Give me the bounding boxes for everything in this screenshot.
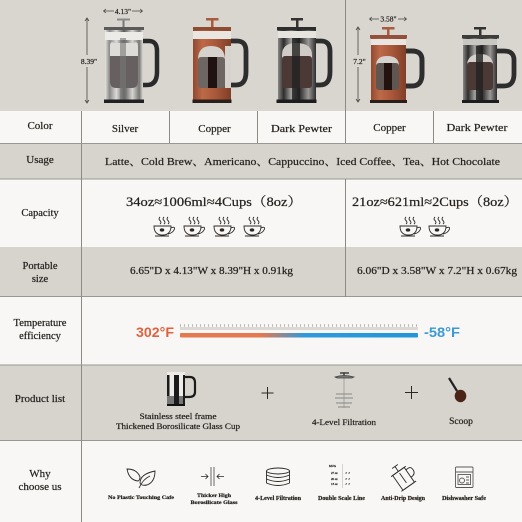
hot temperature: 302°F: [136, 325, 174, 340]
temperature gradient bar: [180, 333, 418, 338]
cell: copper: Copper: [198, 123, 231, 135]
icon: leaves: [127, 469, 155, 488]
row: color: [0, 111, 522, 144]
item caption: scoop: Scoop: [449, 417, 473, 427]
label: color: Color: [27, 120, 53, 132]
icon: anti-drip press: [388, 459, 419, 491]
cell: silver: Silver: [112, 123, 138, 135]
feature: anti-drip design: Anti-Drip Design: [381, 496, 426, 502]
icon: double scale line: ♂ ♂: [345, 471, 350, 475]
dimension: height 8.39 inches: [81, 18, 97, 103]
feature: thicker high borosilicate glass: Thicker High: [197, 493, 231, 499]
icon: dishwasher: [456, 467, 473, 488]
icon: double scale line: [329, 464, 350, 488]
dimension: width 3.58 inches: 3.58": [380, 14, 397, 24]
feature: no plastic touching cafe: No Plastic Touching Cafe: [108, 495, 175, 501]
product: dark pewter large press: [276, 18, 330, 103]
row: product list: [0, 365, 522, 441]
item caption: filter: 4-Level Filtration: [312, 417, 377, 427]
icon: double scale line: 20 oz: [331, 477, 338, 481]
row: portable size: [0, 247, 522, 297]
icon: plus: [405, 386, 418, 399]
capacity small: 21oz≈621ml≈2Cups（8oz）: [352, 194, 518, 209]
label: portable size: size: [32, 274, 48, 285]
feature: dishwasher safe: Dishwasher Safe: [442, 496, 486, 502]
dimension: width 4.13 inches: 4.13": [115, 7, 131, 16]
cell: copper small: Copper: [373, 122, 406, 134]
dimension: width 4.13 inches: [104, 7, 142, 16]
icon: double scale line: 13 oz: [331, 482, 338, 486]
dimension: width 3.58 inches: [370, 14, 406, 24]
product: copper large press: [192, 18, 246, 103]
row: usage: [0, 144, 522, 179]
dimensions large: 6.65"D x 4.13"W x 8.39"H x 0.91kg: [130, 266, 293, 277]
item caption: glass cup: Stainless steel frame: [140, 412, 217, 421]
icons: four coffee cups: [154, 217, 265, 236]
label: why choose us: [18, 468, 62, 493]
icon: filter stack: [266, 468, 290, 486]
item caption: glass cup: Thickened Borosilicate Glass Cup: [116, 422, 240, 431]
icon: double scale line: ♂ ♂: [345, 477, 350, 481]
product: dark pewter small press: [462, 27, 514, 103]
item: glass cup: [167, 372, 195, 406]
icon: double scale line: MUG: [329, 464, 337, 468]
item: scoop: [449, 378, 466, 402]
feature: double scale line: Double Scale Line: [318, 496, 365, 502]
item caption: glass cup: [116, 412, 240, 431]
ruler: [180, 326, 418, 330]
feature: thicker high borosilicate glass: [190, 493, 238, 506]
icon: double scale line: ♂ ♂: [345, 482, 350, 486]
label: why choose us: Why: [29, 468, 51, 480]
label: why choose us: choose us: [18, 481, 62, 493]
cell: dark pewter: Dark Pewter: [271, 123, 332, 135]
cell: dark pewter small: Dark Pewter: [446, 122, 508, 134]
row: temperature efficiency: [0, 297, 522, 365]
item: filter assembly: [335, 372, 354, 408]
icons: two coffee cups: [400, 217, 450, 236]
label: portable size: [22, 261, 58, 285]
capacity large: 34oz≈1006ml≈4Cups（8oz）: [126, 194, 302, 209]
label: temperature efficiency: Temperature: [14, 318, 67, 329]
label: portable size: Portable: [22, 261, 58, 272]
row: capacity: [0, 179, 522, 247]
icon: plus: [262, 387, 274, 399]
feature: thicker high borosilicate glass: Borosilicate Glass: [190, 500, 238, 506]
dimension: height 8.39 inches: 8.39": [81, 57, 97, 66]
icon: thicker glass arrows: [201, 467, 224, 486]
dimensions small: 6.06"D x 3.58"W x 7.2"H x 0.67kg: [357, 266, 517, 277]
label: usage: Usage: [26, 154, 54, 166]
label: capacity: Capacity: [21, 208, 59, 219]
product: copper small press: [370, 27, 422, 103]
usage list: Latte、Cold Brew、Americano、Cappuccino、Iced Coffee、Tea、Hot Chocolate: [105, 156, 500, 168]
row: why choose us: [0, 441, 522, 522]
dimension: height 7.2 inches: 7.2": [353, 57, 366, 66]
label: product list: Product list: [15, 393, 65, 405]
dimension: height 7.2 inches: [353, 27, 366, 102]
panel: product photo band: [0, 0, 522, 111]
feature: 4-level filtration: 4-Level Filtration: [255, 496, 302, 502]
label: temperature efficiency: efficiency: [19, 331, 62, 342]
cold temperature: -58°F: [424, 325, 460, 340]
product: silver large press: [104, 18, 157, 103]
icon: double scale line: 27 oz: [331, 471, 338, 475]
label: temperature efficiency: [14, 318, 67, 342]
